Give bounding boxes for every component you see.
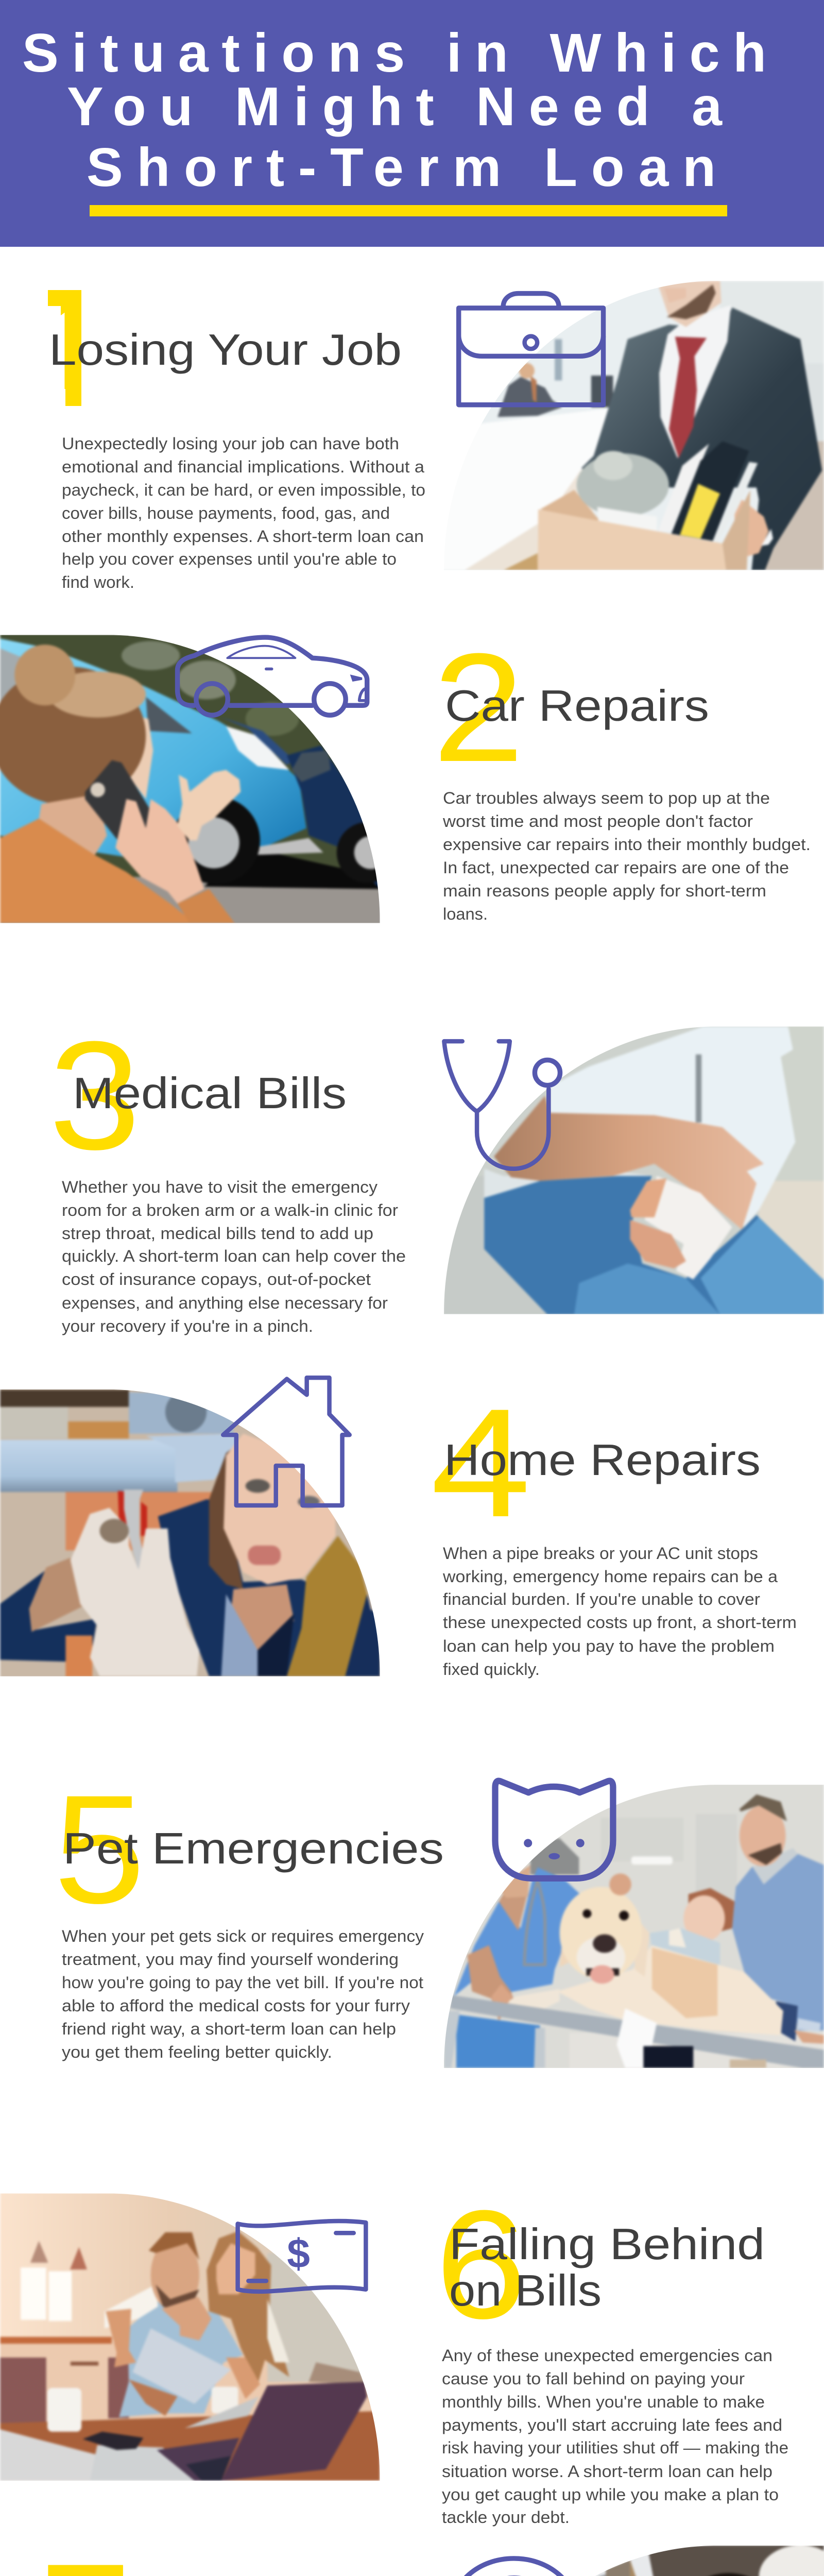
body text: paycheck, it can be hard, or even impossible, to <box>62 481 425 499</box>
body text: treatment, you may find yourself wondering <box>62 1950 399 1969</box>
photo: dog at the vet <box>443 1777 824 2069</box>
body text: quickly. A short-term loan can help cover the <box>62 1247 406 1265</box>
title: Situations in Which <box>22 23 766 83</box>
section 3: Medical Bills <box>49 1009 824 1335</box>
body text: financial burden. If you're unable to cover <box>443 1590 760 1608</box>
body text: cause you to fall behind on paying your <box>442 2369 745 2388</box>
number 1: 1 <box>26 266 112 439</box>
body text: main reasons people apply for short-term <box>443 882 766 900</box>
body text: expensive car repairs into their monthly budget. <box>443 835 811 854</box>
body text <box>62 1927 424 2061</box>
body text: other monthly expenses. A short-term loan can <box>62 527 424 546</box>
body text: When a pipe breaks or your AC unit stops <box>443 1544 758 1563</box>
icon: briefcase <box>459 294 604 405</box>
section 5: Pet Emergencies <box>54 1762 824 2069</box>
body text: When your pet gets sick or requires emergency <box>62 1927 424 1945</box>
icon: house <box>223 1378 350 1505</box>
number 4: 4 <box>431 1376 531 1549</box>
title: You Might Need a <box>67 76 723 137</box>
body text: emotional and financial implications. Without a <box>62 457 424 476</box>
heading: on Bills <box>449 2266 602 2315</box>
photo: couple reviewing bills <box>0 2192 381 2481</box>
body text: Any of these unexpected emergencies can <box>442 2346 772 2365</box>
body text: you get them feeling better quickly. <box>62 2043 332 2061</box>
body text: how you're going to pay the vet bill. If you're not <box>62 1973 423 1992</box>
body text: working, emergency home repairs can be a <box>442 1567 778 1586</box>
heading: Home Repairs <box>444 1436 761 1485</box>
section 6: Falling Behind on Bills <box>0 2178 788 2527</box>
body text: expenses, and anything else necessary for <box>62 1294 388 1312</box>
body text: cost of insurance copays, out-of-pocket <box>62 1270 371 1289</box>
body text <box>442 1544 797 1679</box>
body text <box>62 434 425 591</box>
body text: room for a broken arm or a walk-in clinic for <box>62 1201 398 1219</box>
icon: dollar bill: $ <box>287 2230 310 2277</box>
body text: In fact, unexpected car repairs are one of the <box>443 858 789 877</box>
body text: strep throat, medical bills tend to add up <box>62 1224 373 1243</box>
body text: these unexpected costs up front, a short-term <box>443 1613 797 1632</box>
body text: loans. <box>443 905 488 923</box>
icon: cat face <box>495 1781 613 1878</box>
body text: loan can help you pay to have the problem <box>443 1637 775 1655</box>
body text: you get caught up while you make a plan to <box>442 2485 779 2504</box>
body text <box>62 1178 406 1335</box>
body text: payments, you'll start accruing late fees and <box>442 2416 782 2434</box>
yellow underline <box>90 205 727 216</box>
body text: cover bills, house payments, food, gas, and <box>62 504 390 522</box>
heading: Losing Your Job <box>49 326 402 375</box>
body text: your recovery if you're in a pinch. <box>62 1317 313 1335</box>
body text: situation worse. A short-term loan can help <box>442 2462 772 2481</box>
number 6: 6 <box>435 2178 527 2351</box>
photo: woman on phone after car accident <box>0 634 398 925</box>
photo: man carrying a box <box>443 281 824 572</box>
number 3: 3 <box>49 1009 141 1182</box>
header banner <box>0 0 824 247</box>
body text <box>442 789 811 923</box>
section 7: The Holidays <box>40 2531 824 2576</box>
icon: dollar bill <box>238 2221 366 2292</box>
body text: fixed quickly. <box>443 1660 540 1679</box>
title <box>22 23 766 198</box>
section 4: Home Repairs <box>0 1370 797 1687</box>
body text: help you cover expenses until you're able to <box>62 550 397 568</box>
body text: find work. <box>62 573 134 591</box>
number 1 <box>48 290 81 406</box>
body text: tackle your debt. <box>442 2508 570 2527</box>
body text: risk having your utilities shut off — making the <box>442 2438 788 2457</box>
body text: Whether you have to visit the emergency <box>62 1178 377 1196</box>
heading: Car Repairs <box>445 682 709 731</box>
photo: bandaged hand <box>443 1025 824 1317</box>
icon: wreath <box>450 2558 578 2576</box>
title: Short-Term Loan <box>87 137 716 198</box>
heading: Falling Behind <box>449 2220 765 2269</box>
heading: Pet Emergencies <box>63 1824 444 1873</box>
heading <box>449 2220 765 2315</box>
body text <box>442 2346 788 2527</box>
body text: monthly bills. When you're unable to make <box>442 2393 765 2411</box>
body text: able to afford the medical costs for your furry <box>62 1996 410 2015</box>
body text: worst time and most people don't factor <box>442 812 753 831</box>
number 5: 5 <box>54 1762 145 1936</box>
body text: friend right way, a short-term loan can help <box>62 2020 396 2038</box>
icon: stethoscope <box>444 1041 560 1168</box>
body text: Car troubles always seem to pop up at the <box>443 789 770 807</box>
heading: Medical Bills <box>73 1069 347 1118</box>
photo: woman fixing a leaking pipe <box>0 1370 381 1687</box>
photo: women shopping with gifts <box>443 2545 824 2576</box>
body text: Unexpectedly losing your job can have both <box>62 434 399 453</box>
icon: car <box>178 637 367 715</box>
number 2: 2 <box>433 621 524 794</box>
section 2: Car Repairs <box>0 621 811 925</box>
section 1: Losing Your Job <box>26 266 824 591</box>
